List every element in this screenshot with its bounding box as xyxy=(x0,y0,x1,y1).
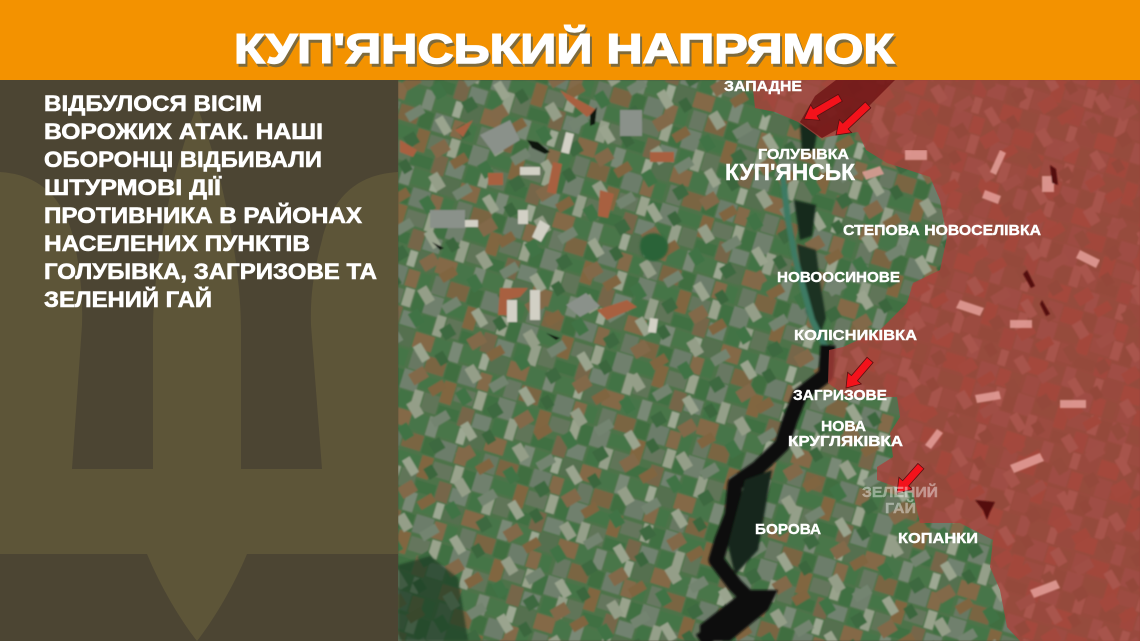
label: Копанки: КОПАНКИ xyxy=(898,530,978,547)
fields and ponds in occupied zone xyxy=(862,150,1100,600)
icon: trident watermark xyxy=(0,106,398,641)
text block: attack summary: НАСЕЛЕНИХ ПУНКТІВ xyxy=(44,231,310,256)
left panel background xyxy=(0,80,398,641)
arrow: Зелений Гай xyxy=(896,463,924,494)
panel: satellite map xyxy=(398,80,1140,641)
text block: attack summary: ВІДБУЛОСЯ ВІСІМ xyxy=(44,91,262,116)
label: Степова Новоселівка: СТЕПОВА НОВОСЕЛІВКА xyxy=(843,222,1041,239)
text block: attack summary xyxy=(44,91,377,312)
title bar xyxy=(0,0,1140,80)
label: Куп'янськ: КУП'ЯНСЬК xyxy=(725,159,856,185)
label: Нова Кругляківка: НОВА xyxy=(821,418,866,435)
label: Голубівка: ГОЛУБІВКА xyxy=(758,146,849,163)
text block: attack summary: ШТУРМОВІ ДІЇ xyxy=(44,175,222,200)
label: Западне: ЗАПАДНЕ xyxy=(724,78,802,95)
title: КУП'ЯНСЬКИЙ НАПРЯМОК xyxy=(234,24,894,72)
label: Зелений Гай xyxy=(862,483,938,517)
label: Колісниківка: КОЛІСНИКІВКА xyxy=(794,327,917,344)
arrow: Голубівка xyxy=(836,102,872,136)
title: КУП'ЯНСЬКИЙ НАПРЯМОК xyxy=(236,27,896,75)
text block: attack summary: ГОЛУБІВКА, ЗАГРИЗОВЕ ТА xyxy=(44,259,377,284)
label: Нова Кругляківка xyxy=(788,418,903,450)
text block: attack summary: ЗЕЛЕНИЙ ГАЙ xyxy=(44,287,212,312)
text block: attack summary: ОБОРОНЦІ ВІДБИВАЛИ xyxy=(44,147,322,172)
label: Зелений Гай: ЗЕЛЕНИЙ xyxy=(862,483,938,501)
text block: attack summary: ПРОТИВНИКА В РАЙОНАХ xyxy=(44,203,362,228)
place labels xyxy=(724,78,1041,547)
text block: attack summary: ВОРОЖИХ АТАК. НАШІ xyxy=(44,119,323,144)
forests and river xyxy=(398,124,828,641)
arrow: Загризове xyxy=(846,356,874,388)
arrow: Западне xyxy=(804,94,843,120)
farmland base xyxy=(398,80,1140,641)
dark occupied pocket xyxy=(800,80,895,138)
occupied territory overlay xyxy=(752,80,1140,641)
label: Нова Кругляківка: КРУГЛЯКІВКА xyxy=(788,433,903,450)
label: Борова: БОРОВА xyxy=(755,521,821,538)
label: Новоосинове: НОВООСИНОВЕ xyxy=(777,269,900,286)
label: Загризове: ЗАГРИЗОВЕ xyxy=(793,387,887,404)
label: Зелений Гай: ГАЙ xyxy=(885,499,916,517)
